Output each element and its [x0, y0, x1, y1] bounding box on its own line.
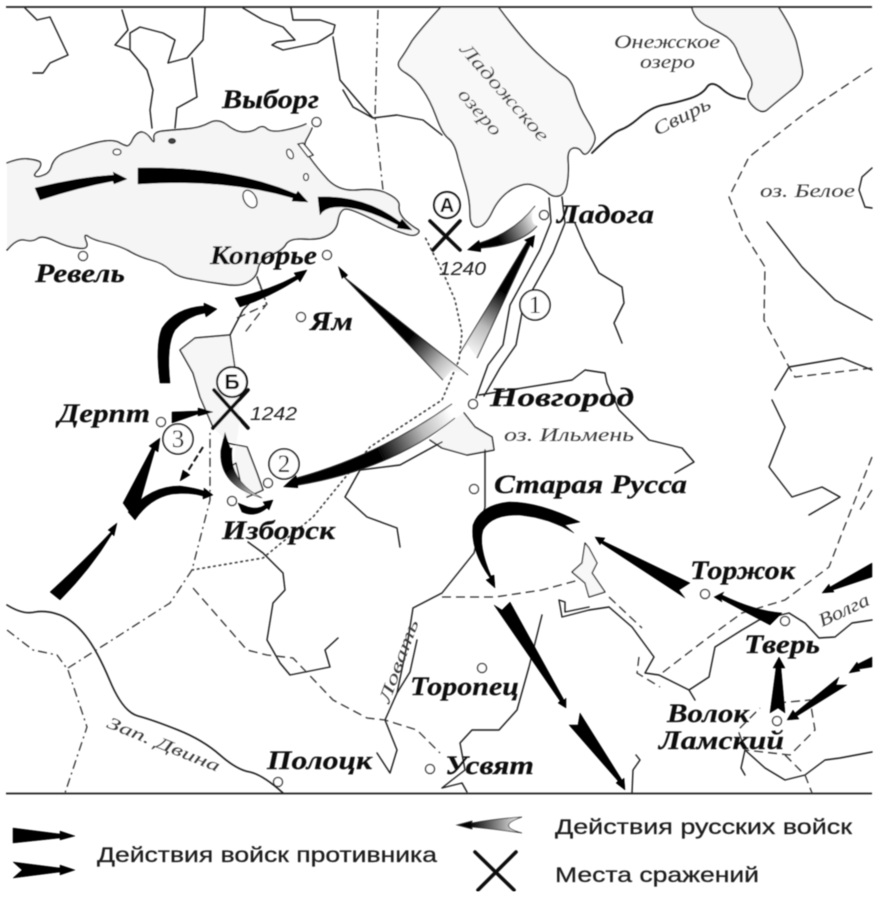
Russian arrows — [221, 206, 537, 498]
city labels: Выборг — [221, 85, 319, 114]
water labels: Ловать — [374, 617, 423, 707]
battle B marker: 1242 — [250, 404, 297, 424]
water labels: Онежское — [614, 32, 720, 53]
battle B marker: Б — [224, 371, 240, 394]
battle A marker: 1240 — [439, 259, 486, 279]
dashed retreat arrow — [180, 447, 203, 481]
legend panel — [13, 816, 853, 890]
city labels: Торопец — [410, 672, 519, 701]
water labels: озеро — [453, 85, 506, 141]
legend: enemy label: Действия войск противника — [97, 844, 437, 867]
city labels: Полоцк — [266, 746, 373, 775]
enemy arrows — [35, 168, 872, 790]
city labels: Новгород — [489, 383, 634, 412]
water labels: Зап. Двина — [105, 713, 223, 776]
islands — [113, 138, 313, 210]
city labels: Дерпт — [56, 399, 150, 428]
legend: enemy arrows — [13, 828, 75, 878]
Lake Onega — [692, 8, 802, 111]
water labels: оз. Белое — [760, 181, 855, 202]
numbered campaign markers — [163, 290, 550, 479]
water bodies — [7, 8, 802, 597]
battle A marker — [430, 192, 486, 279]
water labels: Ладожское — [454, 38, 553, 146]
Lake Ilmen — [430, 413, 494, 455]
water labels: озеро — [640, 52, 695, 73]
city labels: Усвят — [445, 751, 534, 780]
city labels: Ладога — [556, 200, 654, 229]
city labels: Ламский — [658, 726, 784, 755]
battle A marker: А — [440, 195, 454, 217]
Lake Seliger — [572, 543, 605, 597]
water labels: Волга — [815, 590, 873, 632]
water labels: оз. Ильмень — [504, 425, 634, 446]
city labels: Старая Русса — [494, 470, 687, 499]
city labels: Волок — [666, 699, 750, 728]
legend: Russian label: Действия русских войск — [555, 816, 853, 839]
Gulf of Finland — [7, 121, 419, 285]
city labels: Тверь — [744, 630, 820, 659]
numbered campaign markers: 2 — [278, 451, 290, 478]
water labels — [105, 32, 873, 776]
city labels: Ям — [309, 307, 353, 336]
city labels: Изборск — [221, 516, 336, 545]
city labels: Копорье — [209, 241, 317, 270]
numbered campaign markers: 1 — [529, 292, 541, 319]
legend: battle cross — [475, 852, 516, 890]
Lake Peipus — [180, 335, 263, 497]
city labels: Ревель — [34, 259, 125, 288]
legend: Russian arrow — [457, 817, 522, 833]
towns — [78, 118, 790, 786]
numbered campaign markers: 3 — [172, 426, 184, 453]
city labels: Торжок — [690, 556, 796, 585]
battle B marker — [213, 367, 297, 428]
water labels: Свирь — [650, 93, 715, 140]
legend: battle label: Места сражений — [555, 864, 759, 887]
Lake Ladoga — [398, 8, 595, 227]
city labels — [34, 85, 820, 780]
